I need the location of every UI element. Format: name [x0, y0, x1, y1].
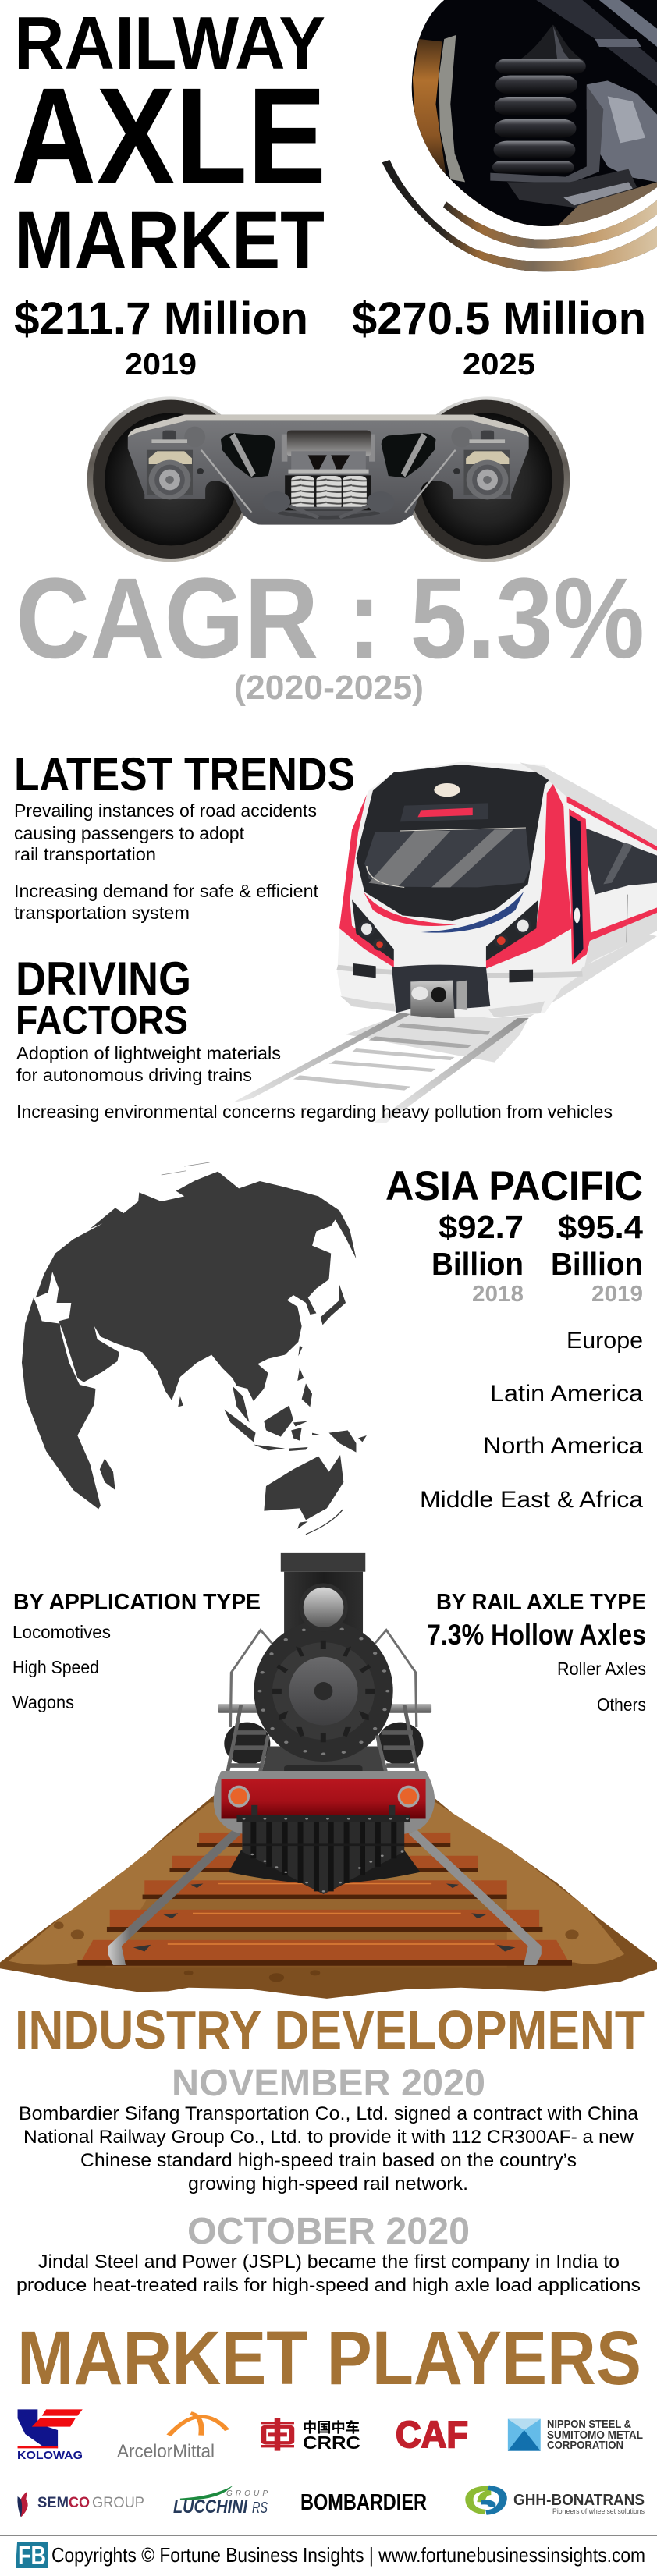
text: driving factors items: for autonomous driving trains [16, 1065, 252, 1085]
illustration: modern train on track [233, 762, 657, 1123]
logo: Semco Group: SEM [37, 2495, 69, 2511]
title: AXLE [11, 60, 326, 213]
logo: CRRC: CRRC [303, 2432, 360, 2453]
value 2019: $211.7 Million [14, 293, 308, 344]
title: MARKET [14, 195, 325, 286]
logo: Nippon Steel and Sumitomo Metal: NIPPON STEEL & [547, 2418, 631, 2431]
text: latest trends items: transportation system [14, 903, 190, 923]
logo: Semco Group: GROUP [92, 2495, 144, 2511]
panel: Asia Pacific values: Billion [431, 1246, 524, 1282]
panel: Asia Pacific values: $95.4 [558, 1209, 643, 1245]
value 2025: $270.5 Million [352, 293, 646, 344]
text: by rail axle type: Roller Axles [557, 1659, 646, 1679]
text: driving factors items [16, 1043, 613, 1122]
text block: October 2020: produce heat-treated rails for high-speed and high axle load applications [16, 2275, 641, 2296]
text: by rail axle type [427, 1590, 646, 1715]
logo: Lucchini RS: GROUP [226, 2489, 268, 2498]
text: by rail axle type: Others [597, 1694, 646, 1715]
logo: Fortune Business Insights: FB [18, 2541, 46, 2570]
text: by application type [12, 1590, 261, 1712]
value 2025 [352, 293, 646, 381]
logo: Nippon Steel and Sumitomo Metal [508, 2418, 643, 2452]
text: latest trends items: causing passengers to adopt [14, 823, 245, 843]
list: other regions [420, 1328, 643, 1513]
text: latest trends items: rail transportation [14, 844, 156, 864]
text block: November 2020: Chinese standard high-speed train based on the country’s [80, 2150, 577, 2171]
title: RAILWAY [14, 2, 325, 85]
panel: Asia Pacific values [385, 1163, 643, 1307]
text: by application type: Wagons [12, 1692, 74, 1712]
icon: railway bogie [87, 396, 570, 562]
logo: Lucchini RS [173, 2486, 268, 2517]
heading: driving factors: DRIVING [16, 953, 191, 1005]
text block: October 2020: OCTOBER 2020 [187, 2211, 470, 2252]
heading: driving factors: FACTORS [16, 998, 188, 1042]
text block: November 2020: NOVEMBER 2020 [172, 2063, 485, 2104]
photo: axle spring in circular crop with rings [377, 0, 657, 275]
list: other regions: North America [483, 1433, 643, 1459]
text block: October 2020: Jindal Steel and Power (JSPL) became the first company in India to [38, 2251, 620, 2273]
text: driving factors items: Adoption of lightweight materials [16, 1043, 281, 1063]
text: by rail axle type: BY RAIL AXLE TYPE [436, 1590, 646, 1615]
value 2019 [14, 293, 308, 381]
logo: Lucchini RS: LUCCHINI [173, 2496, 248, 2517]
logo: Nippon Steel and Sumitomo Metal: SUMITOMO METAL [547, 2429, 643, 2442]
logo: GHH-Bonatrans: Pioneers of wheelset solutions [552, 2507, 645, 2516]
text block: November 2020: Bombardier Sifang Transportation Co., Ltd. signed a contract with China [19, 2103, 639, 2124]
panel: Asia Pacific values: Billion [551, 1246, 643, 1282]
CAGR headline: (2020-2025) [234, 669, 424, 707]
text block: November 2020 [19, 2063, 639, 2195]
panel: Asia Pacific values: 2018 [472, 1282, 524, 1307]
text block: November 2020: growing high-speed rail network. [188, 2173, 468, 2195]
logo: Semco Group: CO [69, 2495, 90, 2511]
logo: ArcelorMittal [117, 2413, 227, 2462]
logo: Nippon Steel and Sumitomo Metal: CORPORATION [547, 2439, 623, 2452]
text: by application type: Locomotives [12, 1622, 111, 1642]
logo: CRRC: 中国中车 [303, 2419, 360, 2436]
logo: Semco Group [17, 2491, 144, 2517]
logo: GHH-Bonatrans: GHH-BONATRANS [513, 2492, 645, 2509]
logo: CRRC [261, 2418, 360, 2453]
illustration: steam locomotive on track [0, 1553, 657, 1999]
text block: November 2020: National Railway Group Co., Ltd. to provide it with 112 CR300AF- a new [23, 2127, 634, 2148]
logo: GHH-Bonatrans [469, 2488, 645, 2516]
title [11, 2, 326, 286]
list: other regions: Latin America [490, 1381, 643, 1407]
value 2025: 2025 [463, 348, 535, 381]
logo: Kolowag: KOLOWAG [17, 2449, 83, 2462]
heading: latest trends: LATEST TRENDS [14, 748, 355, 800]
map: globe Asia Pacific [22, 1162, 367, 1535]
text: latest trends items: Prevailing instances of road accidents [14, 800, 317, 821]
text: by application type: High Speed [12, 1657, 99, 1677]
text: latest trends items: Increasing demand for safe & efficient [14, 881, 319, 901]
value 2019: 2019 [125, 348, 197, 381]
heading: driving factors [16, 953, 191, 1042]
list: other regions: Middle East & Africa [420, 1487, 643, 1513]
logo: Kolowag [17, 2409, 83, 2462]
logo: Bombardier: BOMBARDIER [300, 2490, 427, 2515]
text: latest trends items [14, 800, 319, 923]
panel: Asia Pacific values: ASIA PACIFIC [385, 1163, 643, 1209]
panel: Asia Pacific values: $92.7 [439, 1209, 524, 1245]
text: driving factors items: Increasing environmental concerns regarding heavy pollution from vehicles [16, 1102, 613, 1122]
logo: CAF: CAF [396, 2415, 468, 2456]
logo: Lucchini RS: RS [252, 2500, 268, 2517]
logo: ArcelorMittal: ArcelorMittal [117, 2441, 215, 2462]
panel: Asia Pacific values: 2019 [591, 1282, 643, 1307]
text block: October 2020 [16, 2211, 641, 2296]
list: other regions: Europe [566, 1328, 643, 1354]
text: by application type: BY APPLICATION TYPE [13, 1590, 261, 1615]
